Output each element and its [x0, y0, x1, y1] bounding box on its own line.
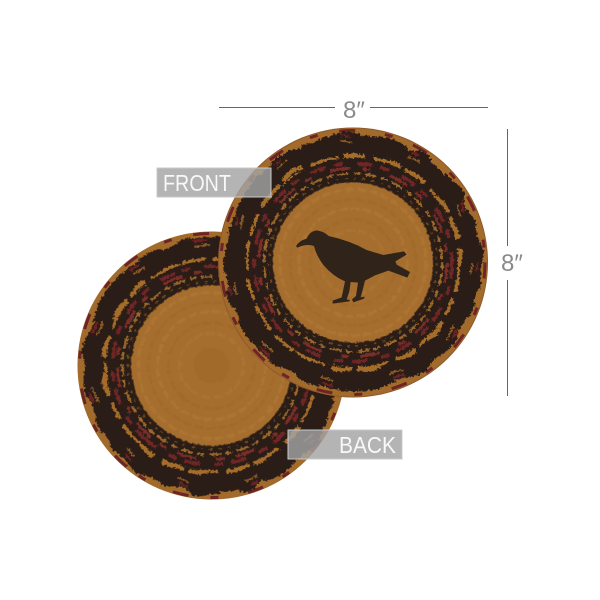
label: back: BACK [339, 432, 397, 458]
front mat [218, 128, 488, 398]
label: front: FRONT [163, 170, 231, 196]
label: back [288, 430, 402, 459]
label: front [157, 168, 271, 197]
dimension: height 8 inches: 8″ [501, 250, 523, 277]
icon: crow silhouette [296, 230, 410, 304]
dimension: width 8 inches: 8″ [343, 97, 365, 124]
back mat [23, 177, 400, 554]
